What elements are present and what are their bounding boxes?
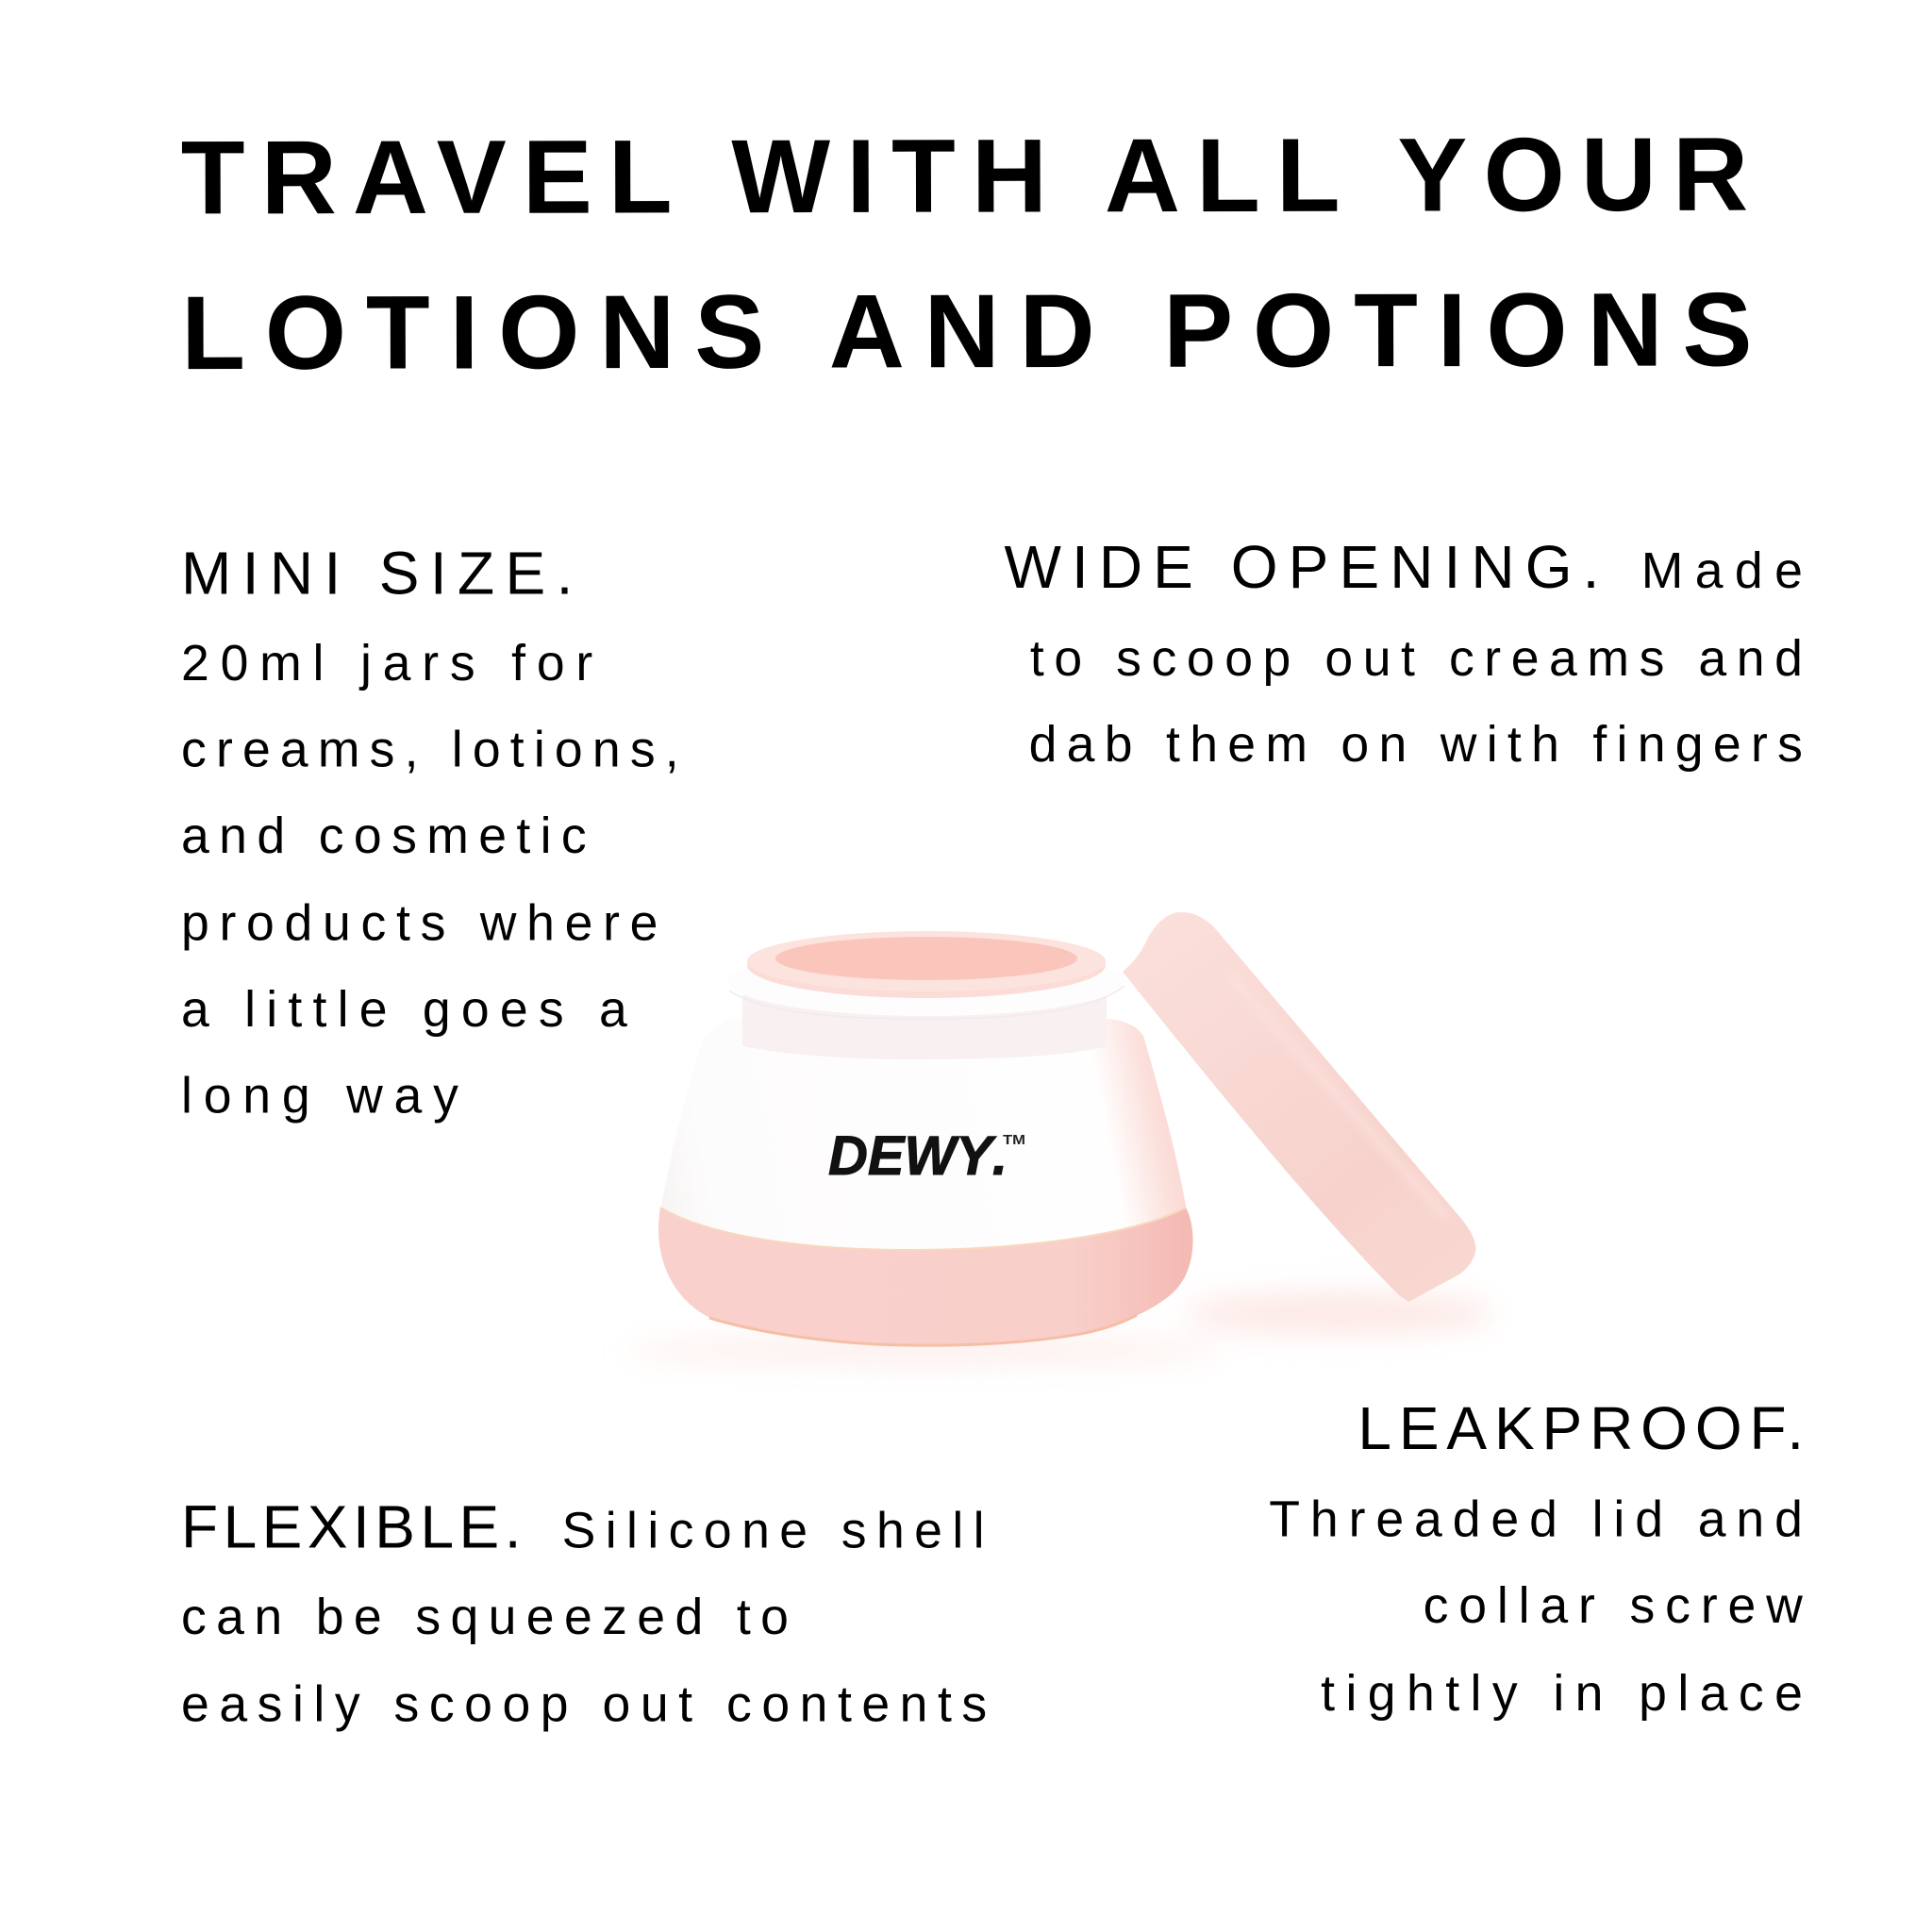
text block: mini size: products where [181, 896, 658, 952]
title [181, 115, 1753, 391]
jar flange [728, 946, 1124, 1019]
jar neck [742, 995, 1107, 1061]
text block: mini size: long way [181, 1068, 458, 1124]
text block: wide opening: to scoop out creams and [1030, 631, 1803, 687]
text block: mini size [181, 540, 679, 1124]
title: TRAVEL WITH ALL YOUR [181, 115, 1748, 237]
text block: leakproof: collar screw [1424, 1578, 1803, 1634]
jar logo: TM [1003, 1132, 1025, 1148]
text block: flexible: can be squeezed to [181, 1590, 789, 1645]
title: LOTIONS AND POTIONS [181, 270, 1753, 391]
product photo: jar and lid [623, 912, 1495, 1362]
text block: mini size: creams, lotions, [181, 722, 679, 777]
text block: mini size: and cosmetic [181, 808, 587, 864]
jar front white face [660, 1036, 1186, 1255]
text block: flexible [181, 1492, 987, 1733]
jar logo: DEWY. [828, 1125, 1008, 1187]
text block: wide opening: Made [1641, 543, 1803, 599]
text block: mini size: MINI SIZE. [181, 540, 573, 608]
text block: leakproof [1269, 1394, 1804, 1722]
text block: flexible: Silicone shell [562, 1503, 985, 1558]
jar body back and sides [660, 1017, 1187, 1255]
text block: leakproof: LEAKPROOF. [1357, 1394, 1804, 1462]
text block: mini size: 20ml jars for [181, 636, 592, 691]
text block: leakproof: Threaded lid and [1269, 1492, 1803, 1548]
text block: leakproof: tightly in place [1321, 1666, 1803, 1722]
text block: flexible: FLEXIBLE. [181, 1492, 521, 1560]
lid [1123, 912, 1475, 1302]
jar pink base [658, 1208, 1193, 1345]
jar pink rim [747, 931, 1106, 998]
text block: wide opening: WIDE OPENING. [1004, 533, 1599, 601]
text block: wide opening [1004, 533, 1803, 773]
text block: wide opening: dab them on with fingers [1029, 717, 1803, 773]
floor shadow [623, 1294, 1495, 1362]
text block: mini size: a little goes a [181, 982, 627, 1038]
text block: flexible: easily scoop out contents [181, 1677, 987, 1733]
